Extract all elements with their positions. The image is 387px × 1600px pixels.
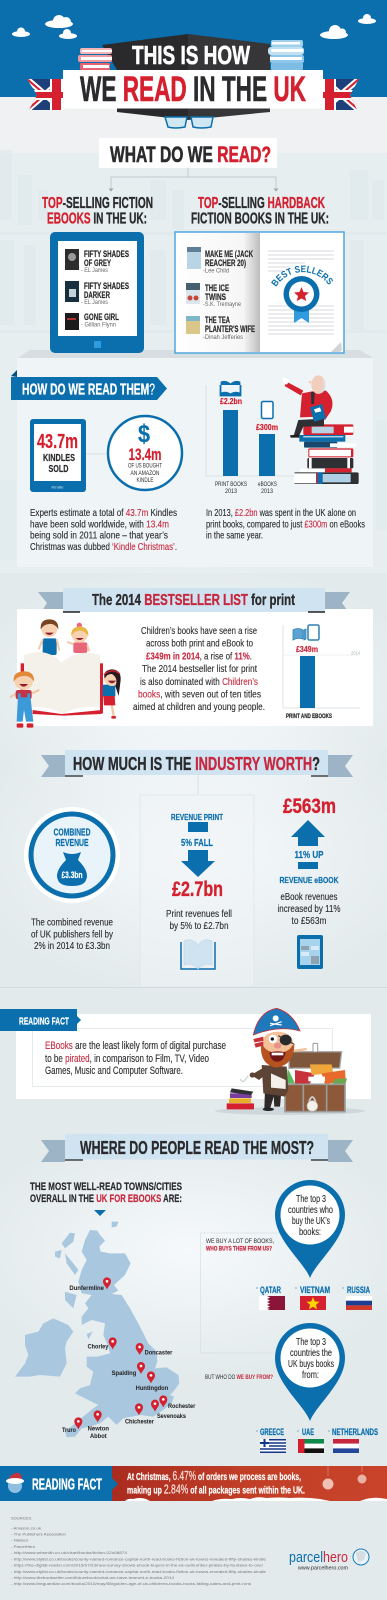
axis labels: eBOOKS bbox=[258, 481, 277, 488]
bar: print books bbox=[223, 410, 238, 476]
kindle device: KINDLES bbox=[43, 453, 75, 464]
pin: doncaster bbox=[136, 1343, 173, 1356]
sources list: - https://the-digital-reader.com/2015/07/23/new-survey-shows-ebook-buyers-in-the-uk-outnumber-pirates-by-fourteen-to-one/ bbox=[11, 1562, 264, 1568]
text: christmas fact: At Christmas, 6.47% of orders we process are books, bbox=[127, 1468, 301, 1483]
book: the tea planters wife: THE TEA bbox=[205, 315, 230, 326]
column: revenue ebook bbox=[278, 795, 340, 969]
column: revenue ebook: £563m bbox=[283, 795, 336, 818]
pin: chichester bbox=[125, 1403, 154, 1425]
kindle device bbox=[30, 419, 86, 492]
small book stack bbox=[227, 1088, 254, 1109]
text: pirated ebooks: EBooks are the least likely form of digital purchase bbox=[45, 1040, 226, 1052]
open book bbox=[21, 652, 103, 716]
pin: doncaster: Doncaster bbox=[145, 1349, 173, 1356]
banner: christmas reading fact bbox=[0, 1466, 387, 1501]
pin: dunfermline: Dunfermline bbox=[69, 1285, 104, 1292]
icon: pink books bbox=[78, 48, 112, 70]
book: fifty shades darker bbox=[65, 281, 129, 306]
arrow: down bbox=[181, 850, 215, 877]
value: 2.2bn: £2.2bn bbox=[220, 396, 242, 406]
pin callout: countries uk buys from bbox=[275, 1323, 345, 1421]
ebook tablet list bbox=[50, 232, 144, 353]
label: who buys them from us: WE BUY A LOT OF BOOKS, bbox=[206, 1238, 274, 1245]
pin: huntingdon bbox=[136, 1371, 168, 1392]
heading: well-read towns: OVERALL IN THE UK FOR EBOOKS ARE: bbox=[30, 1193, 182, 1205]
book: fifty shades of grey bbox=[65, 249, 129, 274]
sources list: - Nielsen bbox=[11, 1538, 28, 1542]
bar chart: print vs ebooks 2013 bbox=[206, 381, 295, 495]
book: the tea planters wife: -Dinah Jefferies bbox=[203, 335, 243, 341]
pin: huntingdon: Huntingdon bbox=[136, 1385, 168, 1392]
label: who buys them from us: WHO BUYS THEM FROM US? bbox=[206, 1246, 272, 1252]
circle: 13.4m bought an amazon kindle: 13.4m bbox=[128, 445, 162, 464]
front boy bbox=[10, 671, 39, 728]
text: children's books paragraph: aimed at children and young people. bbox=[133, 701, 265, 713]
islands bbox=[55, 1222, 118, 1339]
book: fifty shades darker: FIFTY SHADES bbox=[84, 281, 129, 292]
banner: where do people read the most bbox=[41, 1134, 353, 1162]
heading: top-selling hardback: TOP-SELLING HARDBACK bbox=[198, 195, 326, 212]
column: revenue print: 5% FALL bbox=[181, 837, 213, 849]
axis labels: PRINT BOOKS bbox=[215, 481, 247, 488]
badge: best sellers: BEST SELLERS bbox=[271, 266, 333, 287]
pin: rochester: Rochester bbox=[168, 1403, 196, 1410]
icon: open book bbox=[220, 381, 241, 396]
value: 349m: £349m bbox=[296, 644, 318, 654]
label: who buys them from us bbox=[206, 1238, 274, 1252]
sources list: - http://www.theguardian.com/books/2015/may/08/golden-age-of-uk-childrens-books-bucks-falling-sales-and-print-runs bbox=[11, 1581, 251, 1586]
book: fifty shades of grey: - EL James bbox=[81, 268, 108, 274]
text: print vs ebook paragraph: print books, compared to just £300m on eBooks bbox=[206, 518, 365, 530]
book: the ice twins: TWINS bbox=[205, 292, 226, 303]
sources list: - http://www.thebookseller.com/futurebook/what-we-have-learned-e-books-2014 bbox=[11, 1575, 175, 1580]
text: combined revenue paragraph: of UK publishers fell by bbox=[31, 928, 114, 940]
russia: RUSSIA bbox=[347, 1285, 370, 1296]
icon: union flag left bbox=[27, 79, 63, 110]
book: make me: REACHER 20) bbox=[205, 258, 246, 269]
book: fifty shades of grey: OF GREY bbox=[84, 258, 111, 269]
text: pirated ebooks: Games, Music and Computer Software. bbox=[45, 1065, 183, 1077]
heading: what do we read: WHAT DO WE READ? bbox=[110, 142, 271, 167]
pin: sevenoaks: Sevenoaks bbox=[157, 1413, 186, 1420]
pin callout: countries uk buys from: countries the bbox=[290, 1347, 332, 1359]
right girl bbox=[103, 669, 121, 719]
white strip bbox=[63, 70, 323, 108]
great britain bbox=[65, 1230, 179, 1437]
value: 2.7bn: £2.7bn bbox=[172, 878, 223, 901]
text: pirated ebooks bbox=[45, 1040, 226, 1077]
pirate bbox=[240, 1008, 307, 1111]
icon: tablet bbox=[262, 402, 273, 418]
text: print vs ebook paragraph bbox=[206, 507, 365, 542]
text: combined revenue paragraph bbox=[31, 916, 114, 952]
text: christmas fact bbox=[127, 1468, 305, 1496]
circle: 13.4m bought an amazon kindle: $ bbox=[138, 420, 150, 448]
banner: christmas reading fact: READING FACT bbox=[32, 1476, 102, 1494]
pin callout: countries who buy uk books: buy the UK’s bbox=[292, 1215, 330, 1227]
logo: parcelhero: www.parcelhero.com bbox=[298, 1566, 348, 1572]
axis labels: 2013 bbox=[261, 488, 273, 495]
book: gone girl: - Gillian Flynn bbox=[81, 322, 116, 328]
sources list: - ParcelHero bbox=[11, 1544, 36, 1549]
axis labels bbox=[215, 481, 277, 495]
bar: ebooks bbox=[259, 434, 275, 476]
text: children's books paragraph: is also dominated with Children’s bbox=[140, 676, 258, 688]
pin callout: countries uk buys from: UK buys books bbox=[288, 1358, 334, 1370]
hardback open book list bbox=[174, 231, 345, 354]
text: kindle paragraph: being sold in 2011 alone – that year’s bbox=[30, 530, 168, 542]
icon: santa hat bbox=[6, 1473, 24, 1493]
pin: newton abbot bbox=[88, 1410, 109, 1440]
banner: 2014 bestseller list bbox=[17, 588, 373, 726]
column: revenue ebook: REVENUE eBOOK bbox=[280, 875, 339, 885]
map: united kingdom and ireland bbox=[15, 1222, 196, 1440]
icon: book bbox=[181, 940, 215, 969]
text: children's books paragraph: across both print and eBook to bbox=[146, 638, 253, 650]
column: revenue print: by 5% to £2.7bn bbox=[170, 920, 229, 932]
book: the ice twins bbox=[186, 283, 242, 308]
book: the ice twins: -S.K. Tremayne bbox=[203, 302, 242, 308]
circle: combined revenue bbox=[24, 807, 120, 903]
text: children's books paragraph: £349m in 2014, a rise of 11%. bbox=[146, 650, 252, 662]
book: gone girl: GONE GIRL bbox=[84, 312, 119, 323]
text: children's books paragraph bbox=[133, 625, 265, 713]
book: fifty shades darker: - EL James bbox=[81, 300, 108, 306]
boy bbox=[39, 619, 59, 655]
circle: 13.4m bought an amazon kindle: KINDLE bbox=[136, 477, 154, 484]
dark plaque bbox=[102, 34, 270, 120]
pin: chorley bbox=[88, 1337, 117, 1351]
icon: glasses bbox=[165, 117, 213, 128]
sources list: - http://www.stylist.co.uk/books/county-named-romance-capital-north-read-books-fiction-uk-towns-revealed-fifty-shades-kindle bbox=[11, 1556, 267, 1562]
column: revenue print: REVENUE PRINT bbox=[171, 812, 224, 822]
axis labels: 2013 bbox=[225, 488, 237, 495]
logo: parcelhero: parcelhero bbox=[289, 1549, 348, 1566]
book: the ice twins: THE ICE bbox=[205, 283, 229, 294]
text: children's books paragraph: The 2014 bestseller list for print bbox=[142, 663, 257, 675]
icon: union flag right bbox=[323, 79, 359, 110]
banner: how do we read them bbox=[11, 370, 167, 400]
banner: 2014 bestseller list: The 2014 BESTSELLER LIST for print bbox=[92, 592, 295, 609]
text: kindle paragraph: have been sold worldwide, with 13.4m bbox=[30, 518, 169, 530]
circle: 13.4m bought an amazon kindle bbox=[108, 416, 182, 490]
book: make me: MAKE ME (JACK bbox=[205, 249, 253, 260]
column: revenue ebook: eBook revenues bbox=[280, 891, 338, 903]
pin: spalding bbox=[112, 1362, 145, 1377]
pin callout: countries who buy uk books bbox=[275, 1180, 345, 1278]
pin: rochester bbox=[159, 1395, 196, 1410]
icon: blue books bbox=[268, 40, 304, 70]
text: print vs ebook paragraph: in the same year. bbox=[206, 530, 263, 542]
banner: how do we read them: HOW DO WE READ THEM? bbox=[22, 382, 155, 398]
column: revenue print bbox=[166, 812, 232, 969]
tab: reading fact bbox=[0, 1009, 81, 1031]
pin callout: countries who buy uk books: countries who bbox=[288, 1204, 333, 1216]
pin: dunfermline bbox=[69, 1277, 111, 1292]
banner: how much is the industry worth: HOW MUCH IS THE INDUSTRY WORTH? bbox=[73, 754, 320, 774]
text: christmas fact: making up 2.84% of all packages sent within the UK. bbox=[127, 1482, 305, 1496]
icon: ornaments bbox=[322, 1466, 366, 1490]
book: the tea planters wife: PLANTER'S WIFE bbox=[205, 324, 255, 335]
icon: clouds bbox=[12, 14, 376, 39]
illustration: man on stack of books bbox=[283, 375, 359, 484]
pin callout: countries uk buys from: from: bbox=[302, 1369, 319, 1381]
heading: top-selling fiction ebooks: TOP-SELLING FICTION bbox=[42, 195, 153, 212]
sources list bbox=[11, 1516, 267, 1586]
vietnam: VIETNAM bbox=[300, 1285, 330, 1296]
pin: truro bbox=[62, 1417, 82, 1434]
title banner bbox=[27, 34, 359, 128]
kindle device: SOLD bbox=[48, 464, 68, 475]
text: pirated ebooks: to be pirated, in comparison to Film, TV, Video bbox=[45, 1053, 209, 1065]
pin: newton abbot: Newton bbox=[88, 1425, 109, 1432]
sources list: - Amazon.co.uk bbox=[11, 1526, 41, 1530]
illustration: pirate with treasure chest bbox=[215, 1008, 365, 1115]
pin: chichester: Chichester bbox=[125, 1418, 154, 1425]
circle: combined revenue: COMBINED bbox=[54, 828, 90, 838]
book: fifty shades darker: DARKER bbox=[84, 290, 110, 301]
girl bbox=[67, 623, 89, 653]
heading: top-selling hardback bbox=[191, 195, 329, 228]
tab: reading fact: READING FACT bbox=[19, 1016, 69, 1028]
heading: top-selling fiction ebooks: EBOOKS IN THE UK: bbox=[47, 210, 147, 228]
text: kindle paragraph bbox=[30, 507, 177, 553]
bar: 2014 bbox=[300, 656, 315, 708]
stack of books bbox=[294, 424, 359, 484]
pin: sevenoaks bbox=[151, 1400, 186, 1420]
circle: 13.4m bought an amazon kindle: AN AMAZON bbox=[130, 470, 160, 477]
pin callout: countries who buy uk books: The top 3 bbox=[296, 1193, 326, 1205]
kindle device: Kindle bbox=[52, 486, 64, 490]
heading: we read in the uk: WE READ IN THE UK bbox=[80, 69, 306, 109]
text: children's books paragraph: Children’s books have seen a rise bbox=[141, 625, 257, 637]
heading: well-read towns bbox=[30, 1181, 182, 1205]
heading: well-read towns: THE MOST WELL-READ TOWNS/CITIES bbox=[30, 1181, 182, 1193]
label: who do we buy from: BUT WHO DO WE BUY FROM? bbox=[205, 1374, 273, 1381]
panel: bestseller bbox=[17, 609, 373, 726]
pin: newton abbot: Abbot bbox=[90, 1433, 107, 1440]
ireland bbox=[15, 1318, 73, 1377]
treasure chest bbox=[285, 1043, 347, 1112]
sources list: - http://www.stylist.co.uk/books/county-named-romance-capital-north-read-books-fiction-uk-towns-revealed-fifty-shades-kindle bbox=[11, 1569, 267, 1574]
snow bbox=[125, 1497, 387, 1501]
book: gone girl bbox=[65, 312, 119, 330]
flag row: buyers bbox=[256, 1285, 372, 1310]
heading: top-selling fiction ebooks bbox=[42, 195, 153, 228]
value: 300m: £300m bbox=[256, 422, 278, 432]
text: children's books paragraph: books, with seven out of ten titles bbox=[138, 688, 261, 700]
column: revenue ebook: 11% UP bbox=[294, 849, 324, 861]
text: kindle paragraph: Christmas was dubbed ‘Kindle Christmas’. bbox=[30, 541, 177, 553]
sources list: - The Publishers Association bbox=[11, 1532, 66, 1536]
logo: parcelhero bbox=[289, 1549, 369, 1572]
text: kindle paragraph: Experts estimate a total of 43.7m Kindles bbox=[30, 507, 177, 519]
kindle device: 43.7m bbox=[37, 431, 78, 453]
shelf panel bbox=[17, 350, 373, 567]
text: combined revenue paragraph: 2% in 2014 to £3.3bn bbox=[34, 940, 110, 952]
book: make me bbox=[187, 247, 253, 274]
chart: print and ebooks 2014 bbox=[283, 625, 360, 720]
circle: combined revenue: REVENUE bbox=[56, 838, 89, 849]
circle: 13.4m bought an amazon kindle: OF US BOUGHT bbox=[128, 462, 162, 470]
badge: best sellers bbox=[271, 266, 333, 323]
panel: reading fact pirates bbox=[0, 1009, 371, 1099]
book: fifty shades of grey: FIFTY SHADES bbox=[84, 249, 129, 260]
banner: how much is the industry worth bbox=[41, 750, 353, 777]
greece: GREECE bbox=[260, 1427, 284, 1438]
icon: tablet bbox=[297, 935, 323, 969]
pin callout: countries who buy uk books: books: bbox=[299, 1226, 321, 1238]
column: revenue print: Print revenues fell bbox=[166, 908, 232, 920]
chart: print and ebooks 2014: PRINT AND EBOOKS bbox=[286, 714, 332, 720]
sources list: - http://www.whsmith.co.uk/chart/books/fiction-02x08874 bbox=[11, 1550, 128, 1555]
chart: print and ebooks 2014: 2014 bbox=[351, 650, 360, 656]
heading: this is how: THIS IS HOW bbox=[132, 40, 250, 70]
pin: chorley: Chorley bbox=[88, 1344, 109, 1351]
book: make me: -Lee Child bbox=[203, 268, 229, 274]
qatar: QATAR bbox=[260, 1285, 281, 1296]
column: revenue ebook: to £563m bbox=[292, 915, 327, 927]
header: sky band bbox=[0, 0, 387, 97]
column: revenue ebook: increased by 11% bbox=[278, 903, 340, 915]
man bbox=[283, 375, 333, 438]
pin: truro: Truro bbox=[62, 1427, 76, 1434]
pin: spalding: Spalding bbox=[112, 1370, 136, 1377]
illustration: children with book bbox=[10, 619, 121, 728]
flag row: sellers bbox=[256, 1427, 378, 1453]
icon: book and tablet bbox=[293, 625, 319, 640]
text: combined revenue paragraph: The combined revenue bbox=[31, 916, 113, 928]
arrow: up bbox=[291, 820, 325, 846]
book: the tea planters wife bbox=[186, 315, 255, 341]
uae: UAE bbox=[302, 1427, 314, 1438]
pin callout: countries uk buys from: The top 3 bbox=[296, 1336, 326, 1348]
sources list: SOURCES: bbox=[11, 1516, 32, 1520]
icon: money bag: £3.3bn bbox=[62, 870, 82, 880]
